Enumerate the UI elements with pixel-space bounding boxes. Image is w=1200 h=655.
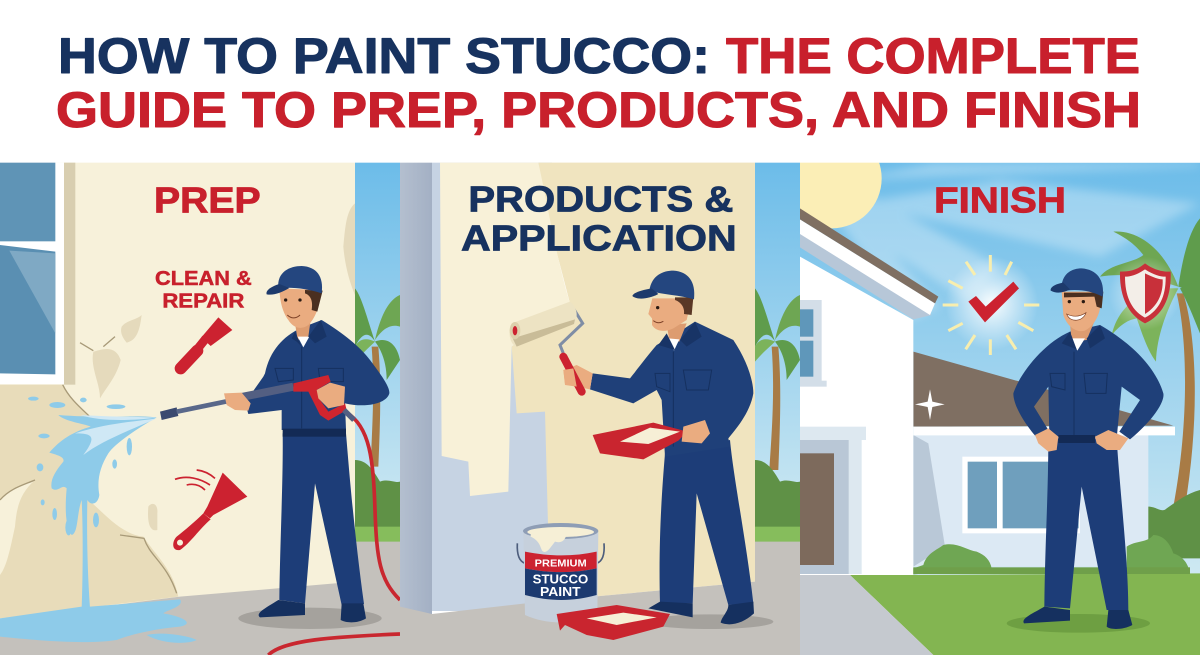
paint roller [510, 302, 583, 353]
palm tree [355, 288, 400, 467]
icon: paint can: PREMIUM [535, 558, 587, 569]
lawn [850, 573, 1200, 655]
window [0, 163, 75, 385]
walkway [800, 575, 933, 655]
red tray held by worker [593, 423, 687, 459]
sun rays [840, 163, 1200, 320]
ground [400, 542, 800, 655]
heading: finish: FINISH [934, 181, 1066, 221]
icon: paint can [517, 523, 604, 622]
title: GUIDE TO PREP, PRODUCTS, AND FINISH [56, 82, 1141, 138]
window on back wing [962, 457, 1080, 533]
freshly painted area [440, 163, 570, 496]
icon: paint can: PAINT [540, 584, 581, 599]
title: HOW TO PAINT STUCCO: [58, 28, 710, 84]
title: THE COMPLETE [726, 28, 1140, 84]
palm tree [1100, 218, 1200, 507]
subheading: clean and repair [155, 268, 252, 312]
icon: glowing check mark [943, 255, 1039, 355]
primed wall [432, 163, 552, 611]
peeling stucco damage [0, 203, 355, 618]
worker with hands on hips [1007, 268, 1163, 633]
panel: products and application [400, 162, 800, 655]
icon: paint tray on floor [557, 605, 670, 640]
palm tree [755, 288, 800, 470]
sparkle [915, 389, 945, 420]
panel: prep [0, 162, 400, 655]
worker with pressure washer [160, 266, 400, 655]
icon: paint can: STUCCO [533, 571, 588, 586]
ground [0, 542, 400, 655]
icon: putty knife [173, 470, 247, 550]
heading: prep: PREP [154, 181, 261, 221]
icon: shield [1108, 257, 1182, 330]
front house [800, 208, 938, 575]
subheading: clean and repair: CLEAN & [155, 268, 252, 290]
corner column [400, 163, 432, 614]
title [56, 28, 1141, 138]
icon: scraper [181, 317, 232, 368]
heading: products and application: PRODUCTS & [468, 180, 733, 220]
bush and grass [755, 460, 800, 543]
heading: products and application: APPLICATION [461, 219, 737, 259]
wall [0, 163, 355, 623]
unpainted wall [512, 163, 755, 601]
water spray and puddle [0, 397, 197, 643]
subheading: clean and repair: REPAIR [162, 290, 245, 312]
back wing of house [913, 352, 1175, 567]
worker with roller [510, 271, 773, 629]
heading: products and application [461, 180, 737, 259]
panel: finish [800, 162, 1200, 655]
sun [782, 128, 882, 228]
bushes [913, 490, 1200, 574]
bush and grass [355, 460, 400, 543]
